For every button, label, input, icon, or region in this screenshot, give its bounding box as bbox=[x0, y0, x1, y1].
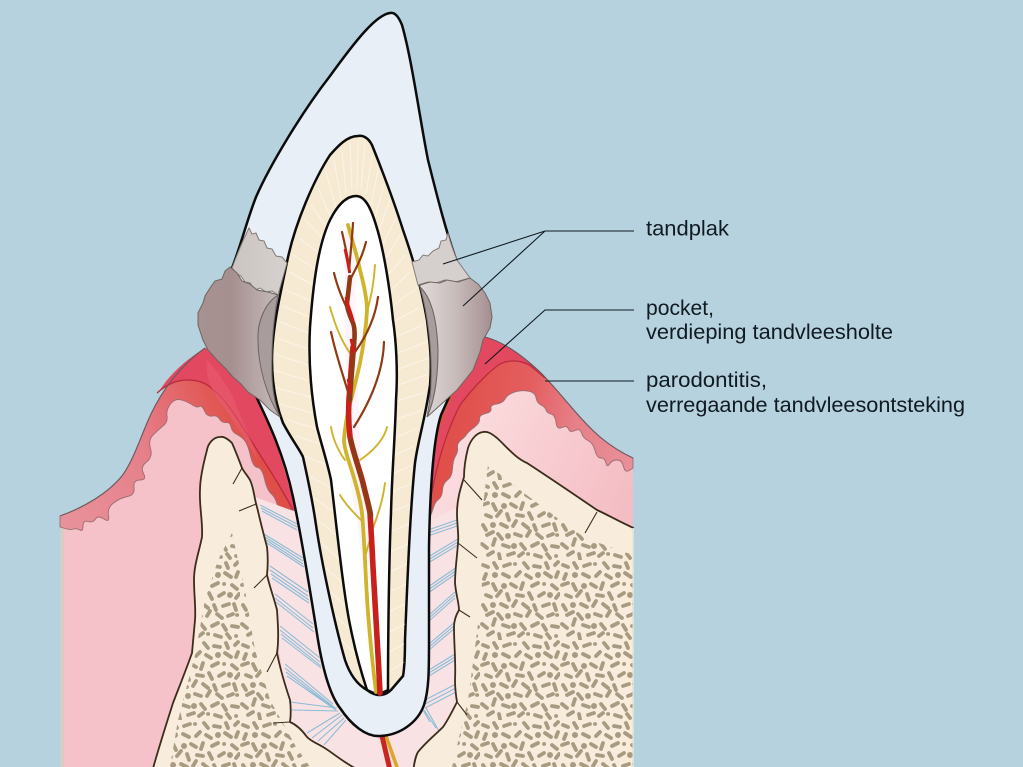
bone body left bbox=[152, 437, 362, 767]
label: parodontitis: verregaande tandvleesontsteking bbox=[646, 394, 965, 417]
bone cracks left bbox=[233, 468, 290, 723]
bone right bbox=[413, 432, 640, 767]
leader: pocket bbox=[485, 310, 634, 364]
enamel and cementum bbox=[225, 13, 475, 736]
inflamed band left bbox=[60, 348, 298, 530]
spongy bone right bbox=[452, 465, 633, 767]
nerve below root bbox=[386, 736, 398, 767]
spongy bone left bbox=[170, 533, 310, 767]
label: tandplak: tandplak bbox=[646, 218, 730, 240]
label: parodontitis bbox=[646, 369, 965, 417]
vein overlay bbox=[347, 277, 371, 515]
bone body right bbox=[413, 432, 640, 767]
artery and vein trunk bbox=[348, 347, 380, 693]
leader: parodontitis bbox=[545, 380, 634, 382]
vessel twigs bbox=[331, 223, 384, 427]
leader lines bbox=[443, 231, 634, 381]
tooth bbox=[225, 13, 475, 736]
pocket fold left bbox=[207, 360, 258, 460]
pulp glow bbox=[350, 235, 368, 560]
right cut edge bbox=[632, 528, 634, 767]
main plaque left bbox=[198, 267, 280, 417]
upper plaque left bbox=[232, 228, 287, 295]
gum tissue bbox=[60, 337, 633, 767]
inner plaque right bbox=[420, 287, 438, 417]
pocket red left bbox=[158, 348, 296, 512]
label: pocket: verdieping tandvleesholte bbox=[646, 321, 893, 344]
dentin tubules bbox=[274, 140, 429, 672]
periodontal ligament space bbox=[255, 497, 462, 767]
artery below root bbox=[382, 736, 390, 767]
label: pocket bbox=[646, 297, 893, 344]
blood vessels below root bbox=[382, 736, 398, 767]
label: pocket: pocket, bbox=[646, 297, 714, 320]
pocket arch line right bbox=[427, 361, 545, 521]
upper plaque right bbox=[412, 233, 470, 285]
ligament fibres right bbox=[423, 520, 458, 733]
gum outline left bbox=[60, 348, 205, 516]
dentin bbox=[272, 136, 431, 695]
inner plaque left bbox=[258, 295, 280, 417]
gum outline right bbox=[485, 337, 633, 458]
label: parodontitis: parodontitis, bbox=[646, 369, 767, 392]
nerve bbox=[344, 225, 376, 692]
inflamed band right bbox=[427, 337, 633, 522]
pocket red right bbox=[427, 337, 545, 522]
ligament background bbox=[255, 497, 462, 767]
gum base left bbox=[60, 348, 330, 767]
plaque on tooth bbox=[198, 228, 492, 417]
red twig accents bbox=[345, 250, 354, 392]
gum left edge strip bbox=[60, 528, 64, 767]
main plaque right bbox=[420, 278, 492, 417]
bone left bbox=[152, 437, 362, 767]
ligament fibres left bbox=[260, 505, 346, 745]
gum base right bbox=[330, 337, 633, 767]
pulp cavity bbox=[309, 196, 397, 695]
nerve branches bbox=[330, 265, 387, 557]
bone cracks right bbox=[457, 480, 597, 715]
labels bbox=[646, 218, 965, 417]
pocket arch line left bbox=[157, 380, 293, 510]
leader: tandplak bbox=[443, 231, 634, 306]
